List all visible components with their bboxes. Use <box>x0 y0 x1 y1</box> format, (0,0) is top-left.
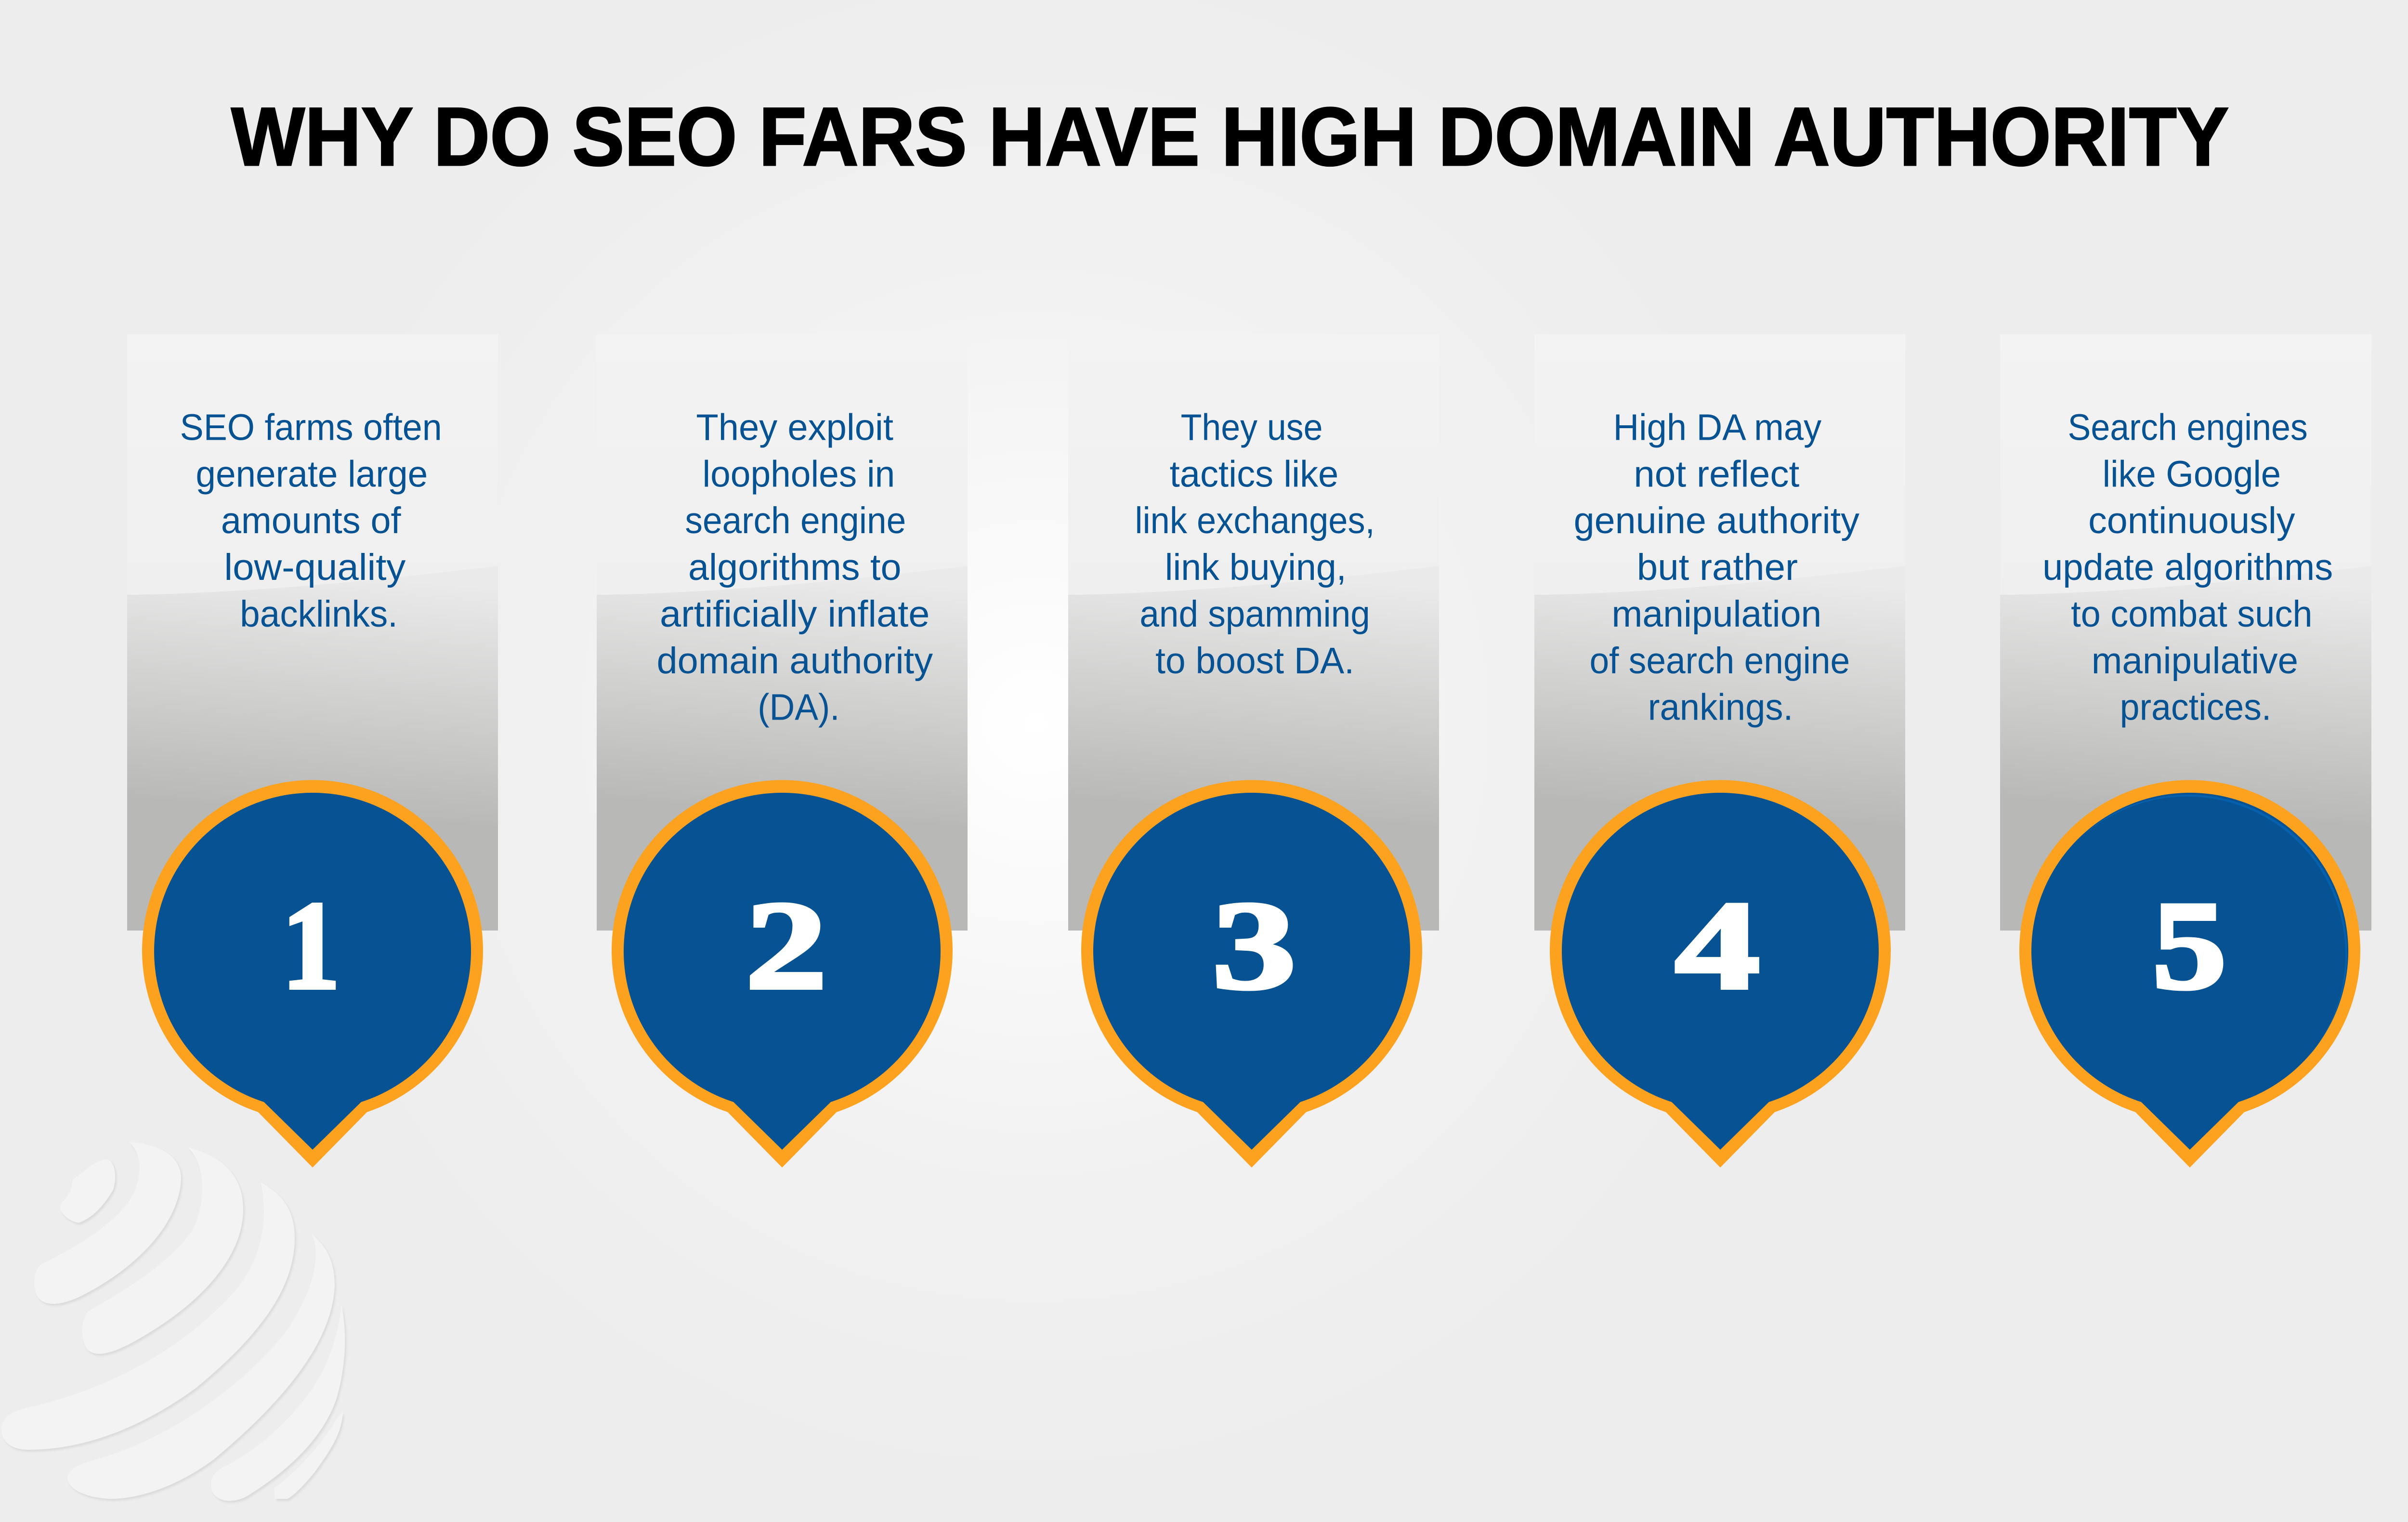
text: step 2 <box>656 407 933 728</box>
text: step 2: (DA). <box>758 687 840 728</box>
pin 5: 5 <box>2152 876 2226 1015</box>
text: step 3: link exchanges, <box>1135 500 1375 541</box>
text: step 3: tactics like <box>1170 453 1338 495</box>
pin 4: 4 <box>1675 876 1760 1015</box>
pin 2 <box>612 780 953 1168</box>
text: step 1: low-quality <box>224 547 406 588</box>
pin 1: 1 <box>282 876 340 1015</box>
pin 1 <box>142 780 483 1168</box>
text: step 3 <box>1135 407 1375 682</box>
panel: step 2 <box>597 334 968 1168</box>
text: step 5: Search engines <box>2068 407 2308 448</box>
text: step 4 <box>1574 407 1859 728</box>
text: step 2: They exploit <box>696 407 893 448</box>
card 1 <box>127 334 498 931</box>
card 4 <box>1534 334 1905 931</box>
panel: step 4 <box>1534 334 1905 1168</box>
pin 5 <box>2019 780 2360 1168</box>
text: step 5: continuously <box>2088 500 2295 541</box>
text: step 5: to combat such <box>2071 593 2313 635</box>
pin 3 <box>1081 780 1422 1168</box>
text: step 1: SEO farms often <box>180 407 442 448</box>
text: step 3: to boost DA. <box>1155 640 1354 682</box>
text: step 2: artificially inflate <box>660 593 929 635</box>
text: step 4: High DA may <box>1613 407 1822 448</box>
panel: step 1 <box>127 334 498 1168</box>
card 3 <box>1068 334 1439 931</box>
text: step 4: manipulation <box>1611 593 1821 635</box>
text: step 3: They use <box>1181 407 1323 448</box>
text: step 2: loopholes in <box>702 453 895 495</box>
text: step 2: search engine <box>685 500 906 541</box>
text: step 5: practices. <box>2120 687 2271 728</box>
text: step 4: of search engine <box>1589 640 1850 682</box>
text: step 5 <box>2042 407 2333 728</box>
text: step 3: and spamming <box>1139 593 1370 635</box>
text: step 1: generate large <box>196 453 428 495</box>
card 5 <box>2000 334 2371 931</box>
pin 4 <box>1550 780 1891 1168</box>
title: WHY DO SEO FARS HAVE HIGH DOMAIN AUTHORITY <box>231 91 2229 183</box>
text: step 5: manipulative <box>2092 640 2298 682</box>
text: step 4: rankings. <box>1648 687 1793 728</box>
text: step 1 <box>180 407 442 635</box>
panel: step 3 <box>1068 334 1439 1168</box>
panel: step 5 <box>2000 334 2371 1168</box>
text: step 5: like Google <box>2103 453 2281 495</box>
pin 2: 2 <box>746 876 827 1015</box>
pin 3: 3 <box>1212 876 1296 1015</box>
text: step 4: genuine authority <box>1574 500 1859 541</box>
text: step 1: amounts of <box>221 500 401 541</box>
text: step 3: link buying, <box>1165 547 1347 588</box>
card 2 <box>597 334 968 931</box>
text: step 4: not reflect <box>1634 453 1799 495</box>
text: step 2: domain authority <box>656 640 933 682</box>
text: step 5: update algorithms <box>2042 547 2333 588</box>
text: step 1: backlinks. <box>240 593 398 635</box>
watermark globe <box>1 1142 346 1503</box>
text: step 4: but rather <box>1637 547 1798 588</box>
text: step 2: algorithms to <box>688 547 901 588</box>
